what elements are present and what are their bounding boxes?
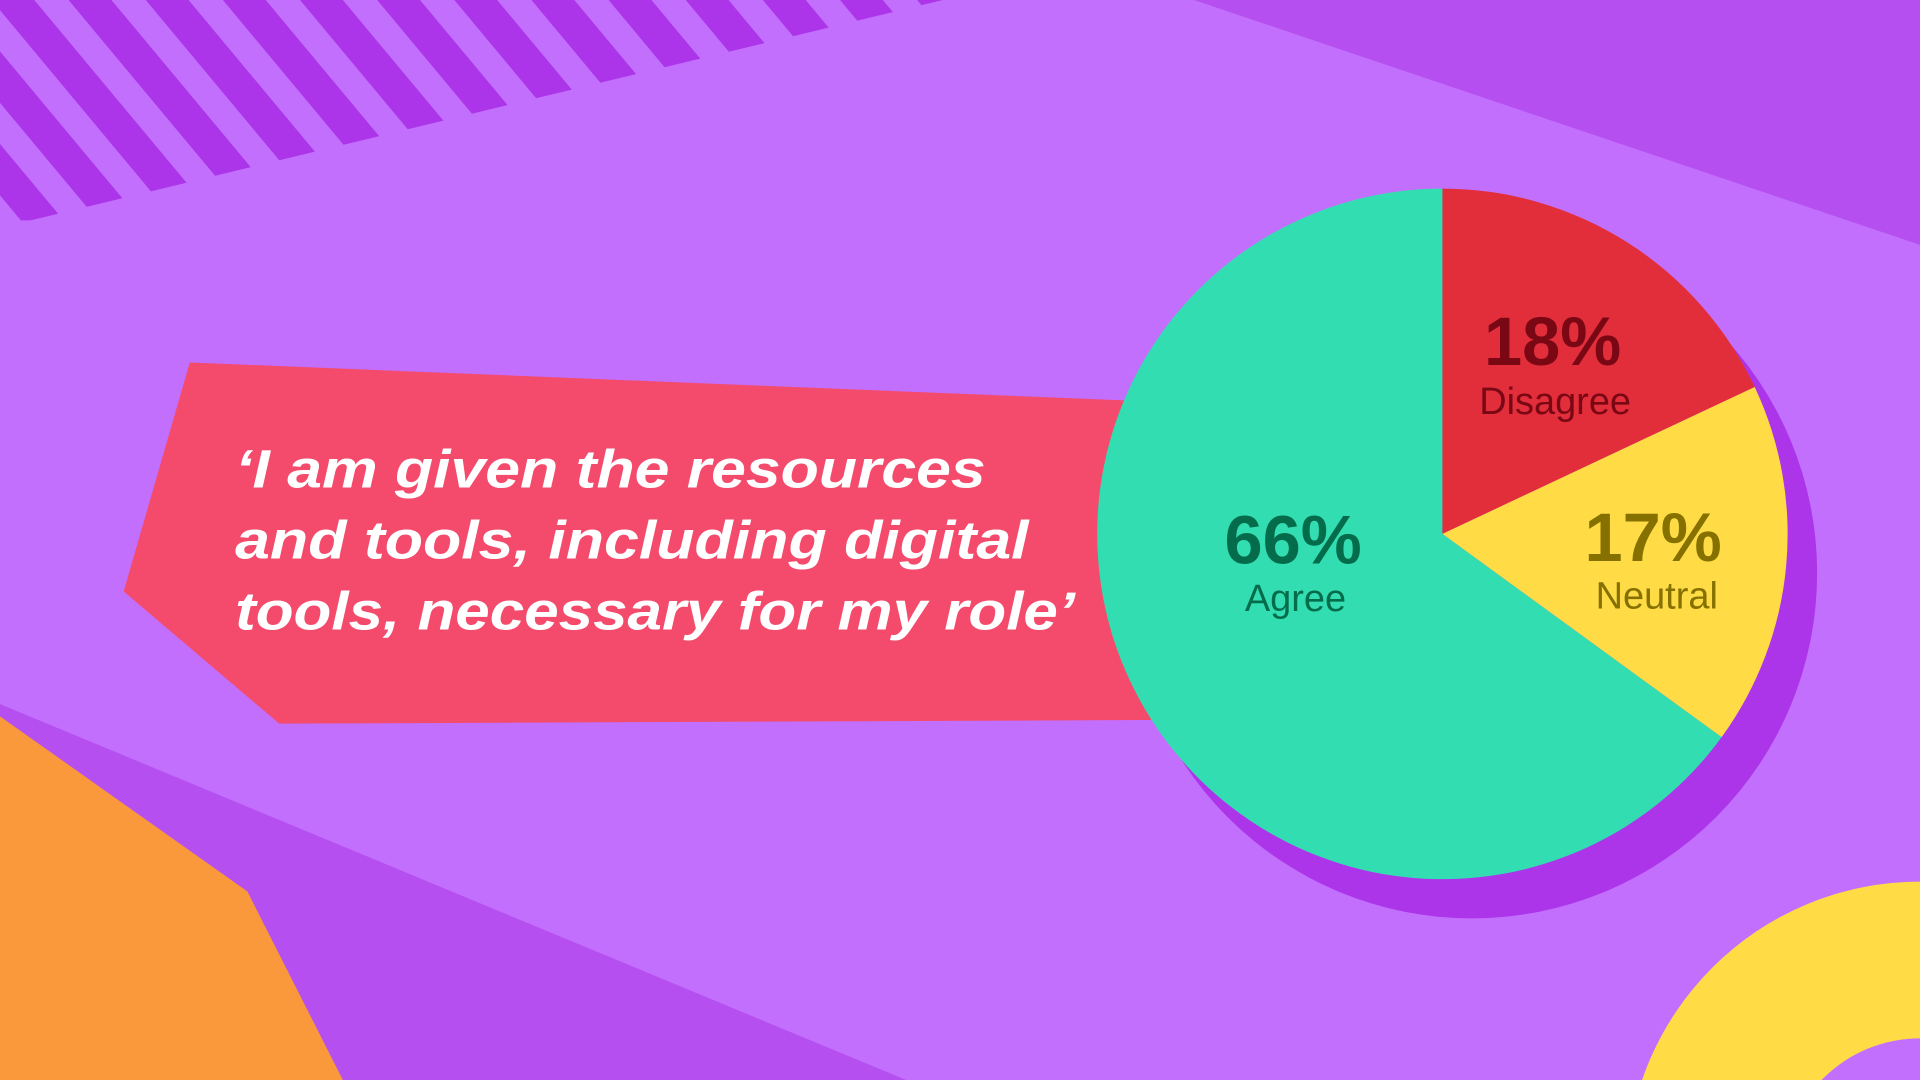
quote banner [124,362,1151,724]
label: disagree: Disagree [1479,381,1631,423]
pie chart [1097,189,1817,918]
label: neutral [1588,513,1720,609]
decorative yellow ring [1626,882,1920,1080]
label: agree: Agree [1245,578,1346,620]
label: disagree [1482,316,1630,422]
slice: disagree [1442,189,1755,534]
label: neutral: 17% [1584,499,1722,576]
label: agree [1227,516,1360,619]
slice: agree [1097,189,1722,879]
quote text: ‘I am given the resources [235,439,986,499]
label: disagree: 18% [1484,303,1621,380]
label: agree: 66% [1224,501,1362,578]
label: neutral: Neutral [1596,576,1718,618]
quote text: tools, necessary for my role’ [235,581,1076,641]
quote text: and tools, including digital [235,510,1030,570]
slice: neutral [1442,387,1788,737]
